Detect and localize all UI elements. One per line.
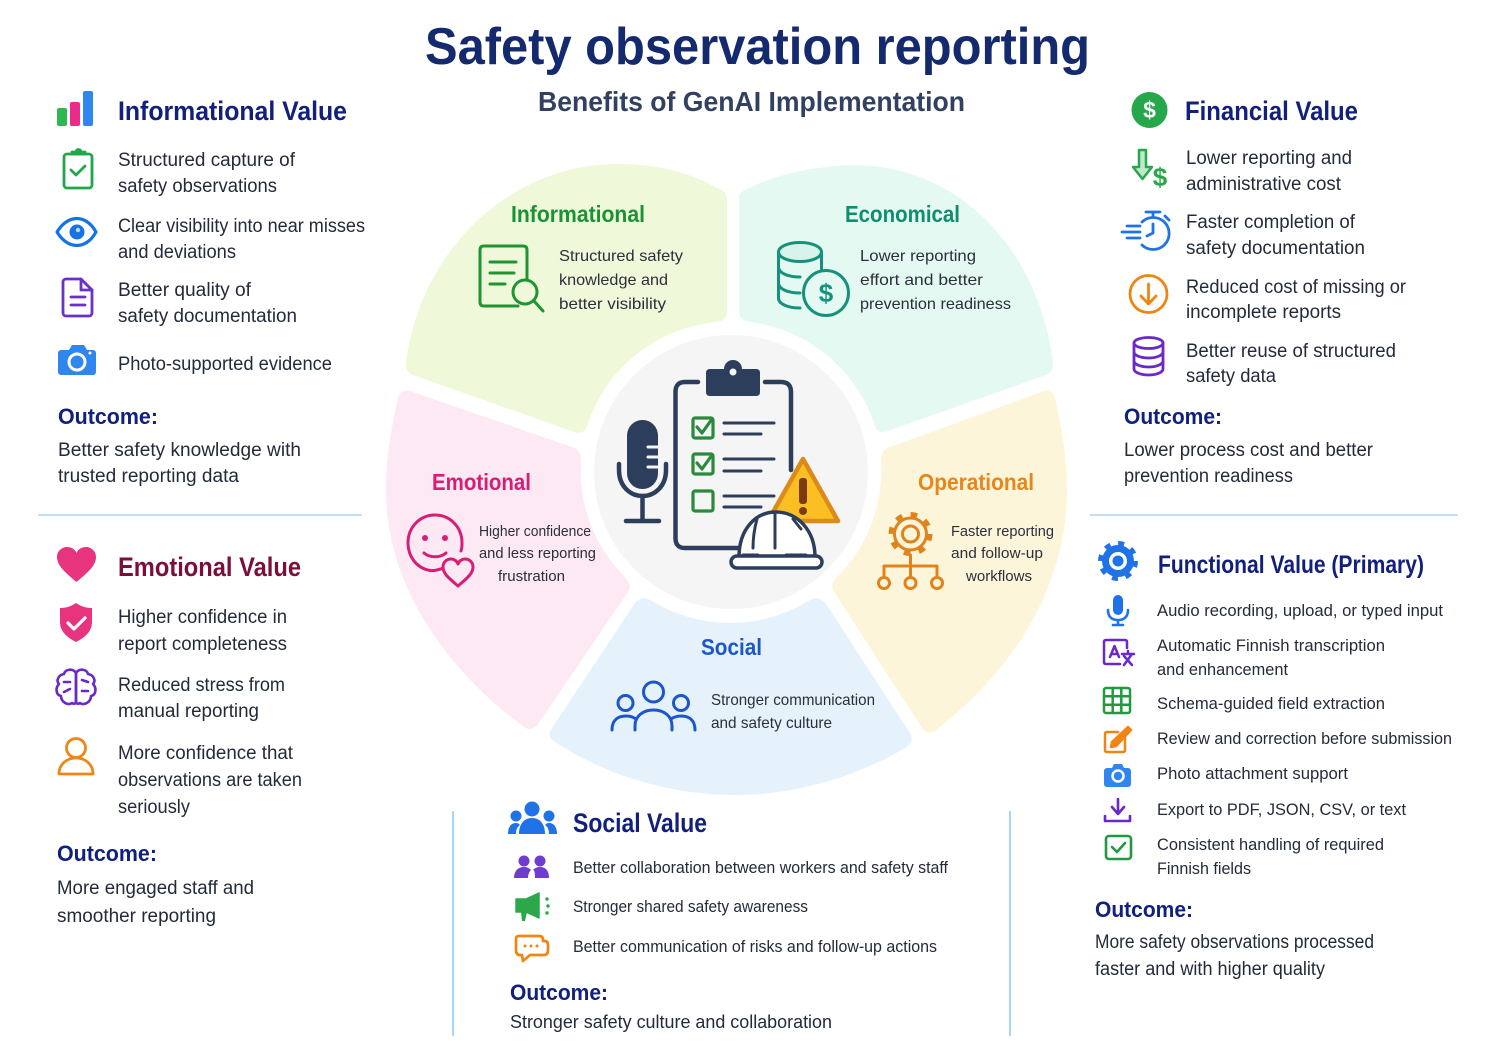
segment text: informational: knowledge and (559, 272, 668, 289)
item text: Better collaboration between workers and safety staff (573, 858, 948, 877)
icon: export download (1105, 799, 1130, 821)
item text: Reduced cost of missing or (1186, 277, 1407, 298)
segment text: operational (951, 523, 1054, 585)
icon label: dollar sign: $ (819, 278, 834, 308)
icon: translate (1104, 640, 1134, 665)
panel: social value (508, 802, 948, 1032)
outcome label: Outcome: (510, 980, 608, 1005)
segment text: operational: Faster reporting (951, 523, 1054, 540)
item text: incomplete reports (1186, 302, 1341, 323)
outcome text: More engaged staff and (57, 878, 254, 899)
icon: clipboard checklist (676, 360, 791, 548)
item text: Automatic Finnish transcription (1157, 636, 1385, 655)
item text: report completeness (118, 634, 287, 655)
segment label: informational: Informational (511, 201, 645, 227)
center circle (594, 335, 868, 609)
icon: smiley with heart (408, 515, 473, 586)
segment: economical (739, 165, 1053, 432)
segment label: social: Social (701, 634, 762, 660)
item text (1186, 341, 1396, 387)
outcome text: prevention readiness (1124, 466, 1293, 487)
item text: More confidence that (118, 743, 294, 764)
item text: Clear visibility into near misses (118, 216, 365, 237)
icon: heart (57, 547, 96, 582)
item text: Better quality of (118, 280, 252, 301)
outcome label: Outcome: (1124, 404, 1222, 429)
segment text: emotional: frustration (498, 568, 565, 585)
outcome text: trusted reporting data (58, 466, 239, 487)
segment: informational (406, 164, 727, 433)
icon: cost down: $ (1153, 162, 1168, 192)
item text (118, 216, 365, 263)
outcome text: Lower process cost and better (1124, 440, 1374, 461)
icon: microphone (619, 420, 666, 521)
icon: check square (1106, 836, 1131, 859)
icon: megaphone (516, 893, 550, 921)
icon: brain (57, 670, 95, 704)
item text (1186, 212, 1365, 259)
outcome text: smoother reporting (57, 906, 216, 927)
segment: operational (832, 391, 1067, 733)
icon: collaboration (514, 856, 549, 878)
panel: financial value (1122, 92, 1407, 487)
outcome text (57, 878, 254, 927)
segment: emotional (386, 391, 630, 729)
item text: seriously (118, 797, 190, 818)
icon: person (59, 738, 93, 774)
icon: camera (58, 345, 96, 375)
panel: informational value (57, 91, 365, 487)
icon: shield check (60, 603, 92, 642)
item text: and deviations (118, 242, 236, 263)
outcome label: Outcome: (58, 404, 158, 429)
segment text: emotional: Higher confidence (479, 523, 591, 540)
icon: camera (1104, 764, 1131, 787)
item text: Better communication of risks and follow-up actions (573, 937, 937, 956)
heading: Financial Value (1185, 96, 1358, 126)
item text: Structured capture of (118, 150, 296, 171)
icon: chat bubble (516, 936, 548, 961)
item text: Better reuse of structured (1186, 341, 1396, 362)
item text: Finnish fields (1157, 859, 1251, 878)
item text: safety observations (118, 176, 277, 197)
icon: people group (612, 682, 695, 730)
item text: Reduced stress from (118, 675, 285, 696)
outcome text (1095, 932, 1374, 980)
item text: and enhancement (1157, 660, 1288, 679)
icon: cost down (1133, 150, 1168, 192)
item text: Higher confidence in (118, 607, 287, 628)
segment text: economical (860, 248, 1011, 313)
outcome text: faster and with higher quality (1095, 959, 1325, 980)
outcome text: Stronger safety culture and collaboration (510, 1012, 832, 1032)
item text: Stronger shared safety awareness (573, 897, 808, 916)
item text: Schema-guided field extraction (1157, 694, 1385, 713)
item text (118, 280, 297, 327)
heading: Emotional Value (118, 552, 301, 582)
icon: stopwatch (1122, 212, 1169, 250)
item text (1186, 148, 1352, 195)
segment text: operational: and follow-up (951, 545, 1043, 562)
item text: manual reporting (118, 701, 259, 722)
item text (118, 607, 287, 655)
item text (1157, 835, 1384, 878)
item text: observations are taken (118, 770, 302, 791)
item text (118, 743, 302, 818)
segment text: social: Stronger communication (711, 692, 875, 709)
segment: social (550, 598, 912, 795)
segment label: operational: Operational (918, 469, 1034, 495)
item text: safety documentation (118, 306, 297, 327)
icon: coins database (778, 242, 848, 316)
icon: table grid (1104, 688, 1130, 713)
item text (1186, 277, 1407, 323)
segment text: social (711, 692, 875, 732)
outcome label: Outcome: (57, 841, 157, 866)
heading: Social Value (573, 808, 707, 838)
icon: gear (1100, 544, 1136, 578)
segment text: operational: workflows (965, 568, 1032, 585)
item text: Photo-supported evidence (118, 354, 332, 375)
segment text: informational: better visibility (559, 296, 666, 313)
icon: bar chart (57, 91, 93, 126)
item text (118, 675, 285, 722)
outcome text: More safety observations processed (1095, 932, 1374, 953)
item text: Faster completion of (1186, 212, 1356, 233)
icon: dollar circle (1132, 92, 1168, 128)
icon: eye (57, 218, 96, 246)
item text: safety data (1186, 366, 1276, 387)
item text: Lower reporting and (1186, 148, 1352, 169)
segment text: economical: Lower reporting (860, 248, 976, 265)
icon: document search (480, 246, 543, 311)
segment label: economical: Economical (845, 201, 960, 227)
item text: Export to PDF, JSON, CSV, or text (1157, 800, 1406, 819)
heading: Informational Value (118, 96, 347, 126)
outcome text: Better safety knowledge with (58, 440, 301, 461)
heading: Functional Value (Primary) (1158, 551, 1424, 579)
icon: dollar circle: $ (1143, 97, 1156, 123)
item text: Audio recording, upload, or typed input (1157, 601, 1443, 620)
segment text: economical: effort and better (860, 272, 984, 289)
icon: gear workflow (878, 515, 942, 588)
panel: emotional value (57, 547, 302, 927)
segment label: emotional: Emotional (432, 469, 531, 495)
icon: people group (508, 802, 557, 834)
segment text: social: and safety culture (711, 715, 832, 732)
icon: clipboard check (64, 150, 92, 188)
outcome text (1124, 440, 1374, 487)
item text: Consistent handling of required (1157, 835, 1384, 854)
outcome text (58, 440, 301, 487)
segment text: emotional (479, 523, 596, 585)
wheel diagram (386, 164, 1067, 795)
icon: warning triangle (768, 459, 838, 521)
segment text: informational: Structured safety (559, 248, 683, 265)
icon: down arrow circle (1130, 276, 1167, 312)
item text (118, 150, 296, 197)
outcome label: Outcome: (1095, 897, 1193, 922)
subtitle: Benefits of GenAI Implementation (538, 86, 965, 117)
item text: administrative cost (1186, 174, 1342, 195)
item text: Photo attachment support (1157, 764, 1348, 783)
icon: database (1134, 338, 1163, 375)
panel: functional value (1095, 544, 1452, 980)
item text: safety documentation (1186, 238, 1365, 259)
segment text: economical: prevention readiness (860, 296, 1011, 313)
icon: microphone (1108, 595, 1128, 625)
icon: document (63, 279, 92, 316)
title: Safety observation reporting (425, 18, 1090, 76)
item text: Review and correction before submission (1157, 729, 1452, 748)
segment text: informational (559, 248, 683, 313)
segment text: emotional: and less reporting (479, 545, 596, 562)
icon: edit pencil (1105, 727, 1131, 752)
icon: hard hat (731, 512, 822, 568)
item text (1157, 636, 1385, 679)
